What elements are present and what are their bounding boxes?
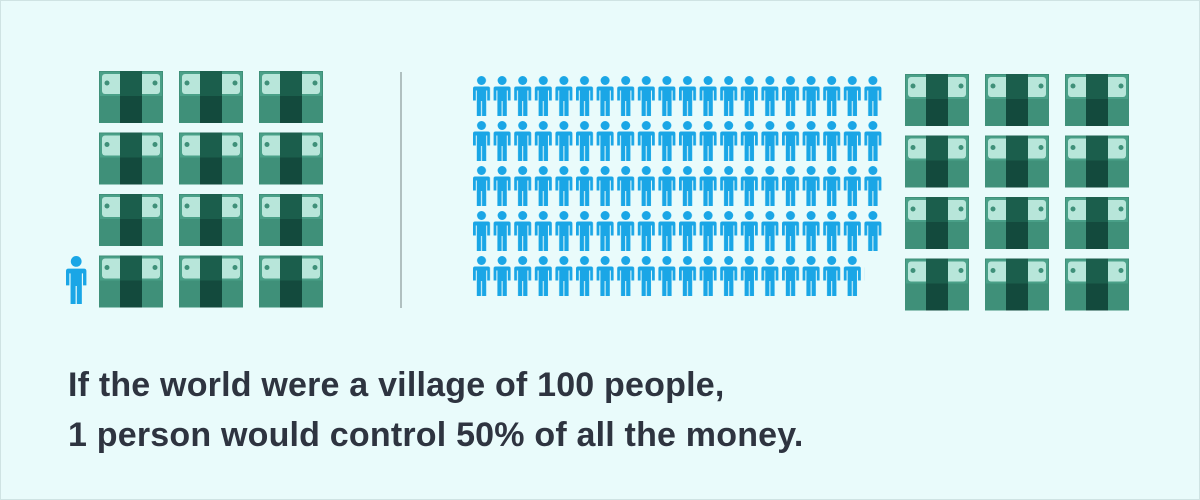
divider [400,72,402,308]
caption: 1 person would control 50% of all the money. [68,416,804,454]
caption [68,366,804,454]
caption: If the world were a village of 100 people, [68,366,724,404]
right money grid [905,74,1129,312]
left money grid [99,71,323,309]
lone person [66,256,86,304]
people grid 99 [473,76,885,301]
